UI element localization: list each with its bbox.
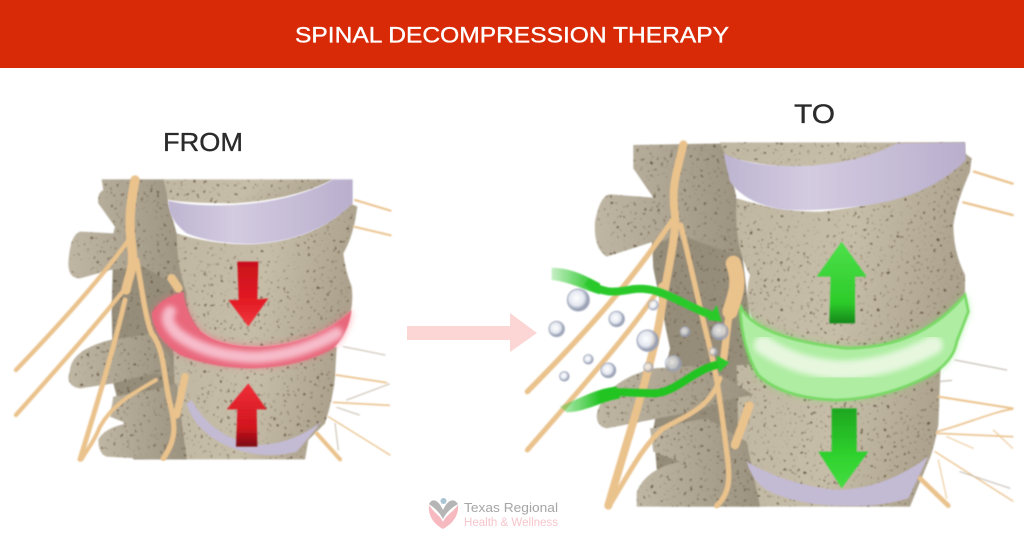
arrow: lower inflow [560, 356, 729, 412]
panel: compressed spine illustration [16, 179, 391, 459]
heading: from: FROM [163, 127, 243, 157]
logo tagline: Health & Wellness [464, 517, 558, 529]
upper healthy disc [168, 179, 353, 244]
arrow: compression up [227, 383, 267, 447]
title: SPINAL DECOMPRESSION THERAPY [295, 22, 729, 48]
panel: decompressed spine illustration [527, 142, 1013, 507]
arrow: upper inflow [552, 268, 722, 322]
bubbles: nutrients [549, 289, 728, 381]
logo name: Texas Regional [464, 501, 558, 515]
upper healthy disc [723, 142, 966, 210]
compressed disc [152, 292, 352, 368]
logo [429, 498, 558, 529]
spine bones [595, 142, 972, 507]
heading: to: TO [794, 99, 835, 129]
spinal nerves [527, 144, 1013, 506]
arrow: from to transition [407, 313, 537, 352]
arrow: decompression down [818, 408, 868, 488]
restored disc [740, 295, 968, 400]
spinal nerves [16, 180, 391, 459]
arrow: compression down [228, 262, 268, 327]
lower healthy disc [747, 457, 928, 506]
lower healthy disc [187, 400, 322, 455]
arrow: decompression up [817, 242, 867, 323]
logo icon [429, 498, 458, 529]
spine bones [68, 179, 357, 459]
header banner [0, 0, 1024, 68]
